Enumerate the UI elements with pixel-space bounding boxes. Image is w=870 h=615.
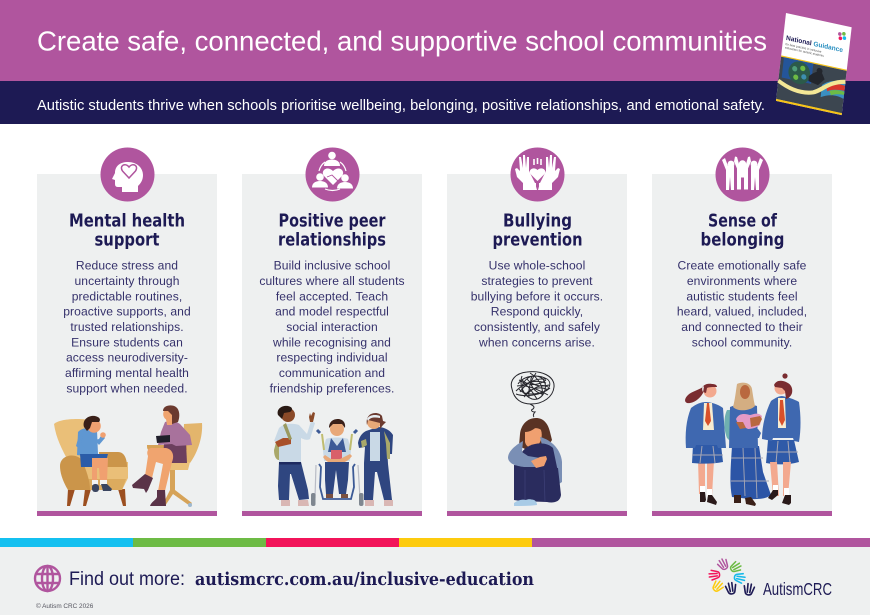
text block: when concerns arise. — [478, 335, 595, 349]
guidance report cover — [776, 13, 852, 115]
text block: bullying before it occurs. — [471, 289, 603, 303]
text block: proactive supports, and — [63, 305, 191, 319]
text block: autistic students feel — [686, 289, 798, 303]
text block: cultures where all students — [259, 274, 405, 288]
text block: feel accepted. Teach — [276, 289, 388, 303]
text block — [677, 258, 807, 349]
icon: three people with raised arms — [716, 148, 770, 202]
text block — [259, 258, 405, 395]
text block: Build inclusive school — [274, 258, 390, 272]
text block: respecting individual — [276, 351, 388, 365]
icon: globe — [35, 566, 60, 591]
text block: Create emotionally safe — [678, 258, 807, 272]
text block: Respond quickly, — [491, 305, 583, 319]
icon: group with heart handshake — [306, 148, 360, 202]
text block: friendship preferences. — [270, 381, 394, 395]
call to action — [69, 568, 534, 590]
heading — [278, 212, 386, 250]
panel: bullying prevention — [447, 148, 627, 516]
copyright: © Autism CRC 2026 — [36, 602, 94, 610]
guidance report cover: for best practice in inclusive — [785, 42, 822, 54]
text block: Ensure students can — [71, 335, 183, 349]
text block: affirming mental health — [65, 366, 189, 380]
text block: while recognising and — [272, 335, 391, 349]
panel: sense of belonging — [652, 148, 832, 516]
text block: and connected to their — [681, 320, 803, 334]
heading — [69, 212, 185, 250]
text block: strategies to prevent — [481, 274, 593, 288]
colour stripe — [0, 538, 870, 547]
header banner — [0, 0, 870, 81]
logo: Autism CRC: AutismCRC — [763, 579, 832, 599]
panel: mental health support — [37, 148, 217, 516]
text block: trusted relationships. — [70, 320, 184, 334]
illustration: three students, one using a wheelchair — [274, 406, 393, 506]
text block — [63, 258, 191, 395]
logo: Autism CRC — [709, 557, 832, 599]
heading: Positive peer — [278, 212, 386, 232]
text block: support when needed. — [66, 381, 188, 395]
heading: prevention — [492, 230, 582, 250]
text block: consistently, and safely — [474, 320, 601, 334]
text block: environments where — [687, 274, 797, 288]
footer band — [0, 547, 870, 615]
call to action: Find out more: — [69, 568, 185, 590]
text block — [471, 258, 603, 349]
icon: head with heart — [100, 148, 154, 202]
call to action: autismcrc.com.au/inclusive-education — [195, 569, 534, 590]
panel: positive peer relationships — [242, 148, 422, 516]
heading: Bullying — [503, 212, 572, 232]
subtitle band — [0, 81, 870, 124]
heading — [492, 212, 582, 250]
illustration: three students in blazers — [685, 373, 800, 506]
illustration: distressed student with tangled thoughts — [508, 372, 562, 506]
guidance report cover: National Guidance — [786, 35, 844, 54]
text block: Reduce stress and — [76, 258, 178, 272]
text block: school community. — [692, 335, 792, 349]
text block: Use whole-school — [489, 258, 585, 272]
heading: belonging — [700, 230, 784, 250]
text block: access neurodiversity- — [66, 351, 188, 365]
guidance report cover: education for autistic students — [785, 45, 825, 58]
title: Create safe, connected, and supportive school communities — [37, 26, 767, 56]
heading: support — [94, 230, 160, 250]
subtitle band: Autistic students thrive when schools prioritise wellbeing, belonging, positive relationships, and emotional safety. — [37, 97, 765, 114]
text block: and model respectful — [275, 305, 389, 319]
heading: Sense of — [708, 212, 777, 232]
illustration: boy and counsellor in armchairs — [54, 405, 202, 507]
icon: hands holding heart — [510, 148, 564, 202]
heading: Mental health — [69, 212, 185, 232]
text block: heard, valued, included, — [677, 305, 807, 319]
heading — [700, 212, 784, 250]
text block: communication and — [279, 366, 385, 380]
text block: social interaction — [286, 320, 378, 334]
text block: uncertainty through — [74, 274, 180, 288]
text block: predictable routines, — [72, 289, 182, 303]
heading: relationships — [278, 230, 386, 250]
